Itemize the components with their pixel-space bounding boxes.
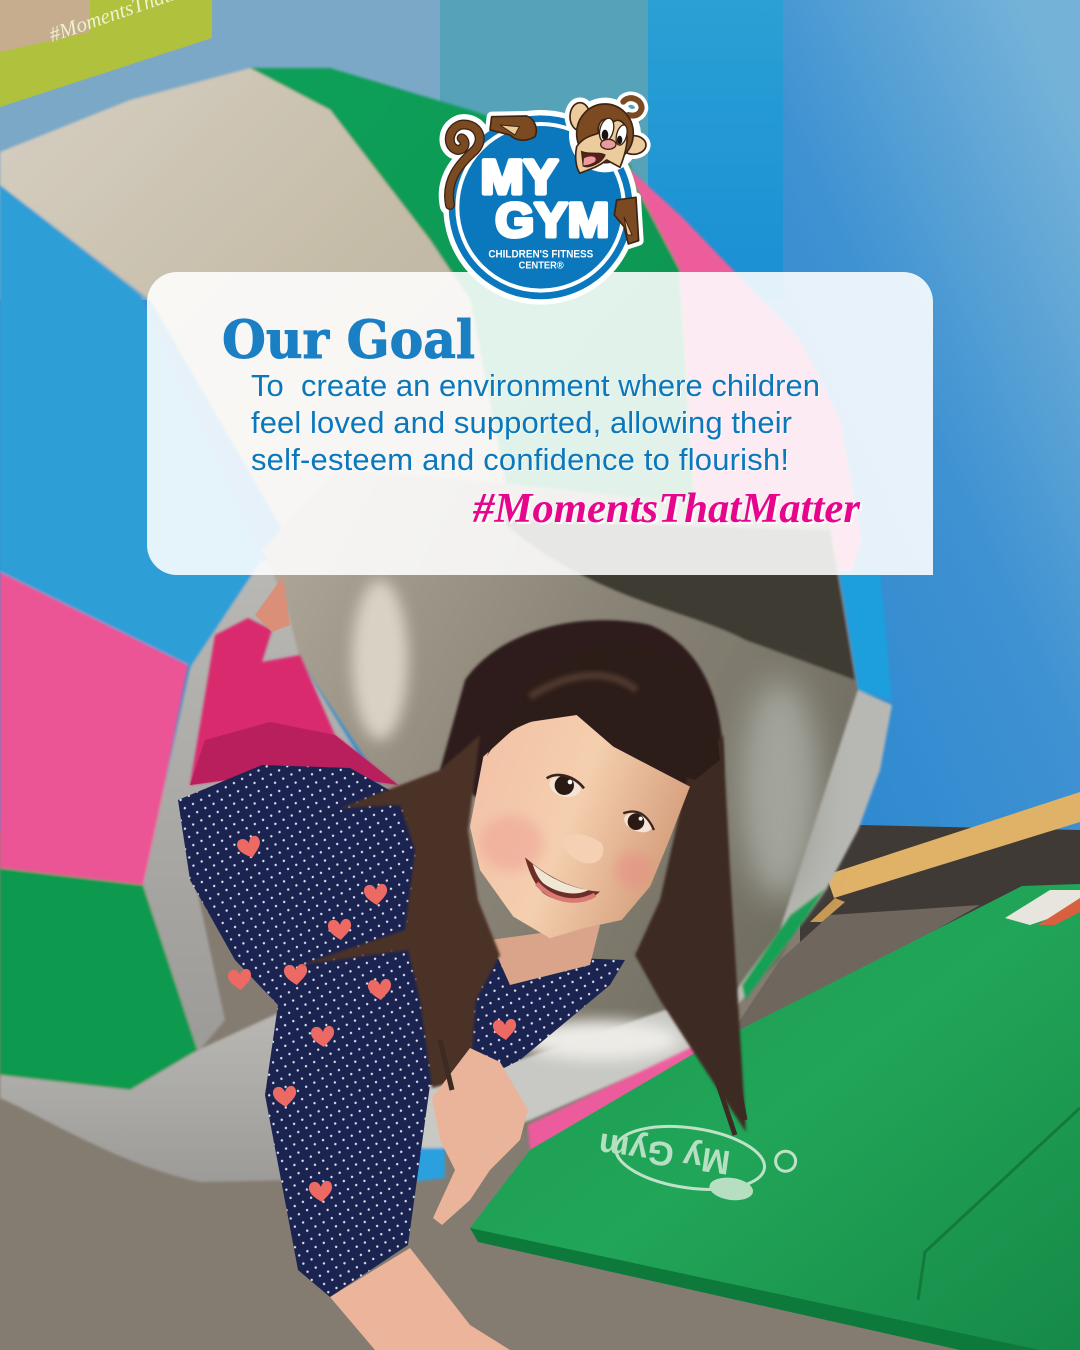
fringe (487, 642, 720, 780)
hand (432, 1048, 528, 1225)
ball: blue strip (362, 1148, 445, 1184)
body line 2: feel loved and supported, allowing their (251, 405, 792, 440)
wooden beam lower piece (810, 898, 845, 922)
iris right (628, 813, 644, 830)
floor: carpet (0, 830, 1080, 1350)
logo: top hand white backing (490, 116, 536, 140)
mat tag (1005, 890, 1080, 925)
monkey: hair curl (623, 98, 642, 116)
mat logo monkey (708, 1175, 755, 1203)
logo: tail brown (449, 125, 480, 205)
eyebrow right shadow (623, 811, 654, 830)
photo: inflatable ball (0, 68, 892, 1184)
ball: pink right panel (625, 165, 862, 575)
ball: right silver rim (700, 690, 892, 1040)
floor: dark baseboard (800, 825, 1080, 1000)
neck (490, 925, 600, 985)
hair right side (635, 735, 746, 1132)
hair left side (300, 735, 500, 1088)
logo: tagline 1: CHILDREN'S FITNESS (488, 248, 594, 260)
monkey: right eye (614, 124, 629, 146)
poster on wall (0, 0, 228, 107)
mat logo circle (612, 1118, 769, 1198)
logo: top finger (500, 125, 519, 135)
monkey: white backing head (569, 98, 641, 172)
ball: pink left panel (0, 572, 188, 885)
eye right (622, 809, 655, 836)
wooden beam (826, 792, 1080, 898)
face (470, 715, 690, 938)
logo: monkey head (565, 97, 651, 173)
logo: top hand (490, 116, 536, 140)
photo: girl (178, 576, 746, 1350)
ball: silver bottom panel (0, 1010, 300, 1182)
ball: green top panel (248, 68, 700, 560)
ball: green left panel (0, 868, 198, 1090)
logo: tagline 2: CENTER® (519, 260, 564, 271)
lip (537, 883, 595, 901)
logo: inner white ring (457, 124, 624, 291)
logo: white circle (443, 110, 638, 305)
logo: right hand white backing (614, 197, 639, 244)
mat tag red stripe (1038, 898, 1080, 925)
monkey: white backing left ear (565, 97, 595, 136)
face details (470, 642, 720, 938)
monkey: right ear (621, 136, 646, 154)
hashtag: #MomentsThatMatter (472, 486, 861, 532)
poster photo corner (0, 0, 90, 52)
monkey: face (576, 119, 627, 173)
ball: blue right patch (826, 570, 892, 700)
wall: right blue (770, 0, 1080, 835)
dress (178, 765, 625, 1297)
cheek right (615, 852, 652, 888)
monkey: head (577, 104, 633, 163)
logo: My Gym monkey (443, 97, 651, 305)
mat front edge (470, 1228, 1040, 1350)
wall: left grey-blue (0, 0, 445, 300)
hair sheen (530, 675, 637, 697)
cheek left (480, 815, 543, 872)
logo: GYM wordmark: GYM (495, 194, 609, 248)
mat fold (918, 1108, 1080, 1300)
ball: inside silver (262, 470, 860, 1150)
body text (251, 368, 820, 477)
wall: centre teal (440, 0, 655, 300)
silver reflection (740, 680, 820, 900)
eye left (547, 772, 583, 800)
hair cap back (440, 620, 723, 800)
logo: tail outline (449, 125, 480, 205)
loose hair strands (440, 990, 745, 1135)
foot (255, 576, 290, 632)
photo: green gym mat (470, 884, 1080, 1350)
ball: pink strip (528, 1045, 700, 1150)
ball: inside dark shade (500, 520, 855, 680)
silver highlight (352, 580, 408, 740)
monkey: white backing curl (623, 98, 642, 116)
monkey: left eye (597, 117, 616, 143)
mat logo text: My Gym (596, 1125, 733, 1181)
monkey: tongue (583, 156, 596, 165)
ball: silver rim left (143, 560, 380, 1052)
iris left (555, 776, 574, 795)
teeth (533, 864, 588, 893)
body line 1: To create an environment where children (251, 368, 820, 403)
ball: inner bottom silver (360, 1000, 700, 1150)
hearts on dress (228, 835, 576, 1202)
nose (562, 834, 603, 863)
eye glint right (639, 817, 643, 821)
ball: blue left panel (0, 185, 262, 668)
wall: bright blue column (648, 0, 783, 300)
body line 3: self-esteem and confidence to flourish! (251, 442, 789, 477)
mat logo print (594, 1115, 798, 1208)
silver reflection lower (520, 1020, 680, 1060)
ball: cream silver top panel (0, 68, 520, 560)
floor: grey strip behind mat (720, 905, 980, 1050)
monkey: nose (601, 139, 616, 149)
arm skin lower (330, 1248, 510, 1350)
monkey: mouth (582, 152, 605, 167)
monkey: left ear (570, 103, 590, 131)
eye glint left (568, 780, 572, 784)
mat logo tail (774, 1150, 797, 1173)
ball: green sliver (742, 888, 826, 1000)
logo: blue circle (449, 115, 633, 299)
eyelid left (547, 775, 584, 788)
logo: right finger (624, 217, 632, 235)
monkey: white backing right ear (616, 131, 651, 159)
legs: pink pants (190, 618, 398, 785)
logo: right hand (614, 197, 639, 244)
monkey: right pupil (617, 136, 622, 144)
mat surface (470, 884, 1080, 1350)
logo: tail dark (449, 125, 480, 205)
heading: Our Goal: Our Goal (222, 310, 475, 371)
monkey: left pupil (602, 130, 608, 140)
translucent text panel (147, 272, 933, 575)
mouth (525, 857, 600, 902)
skirt band (190, 722, 398, 785)
logo: MY wordmark: MY (481, 150, 558, 204)
